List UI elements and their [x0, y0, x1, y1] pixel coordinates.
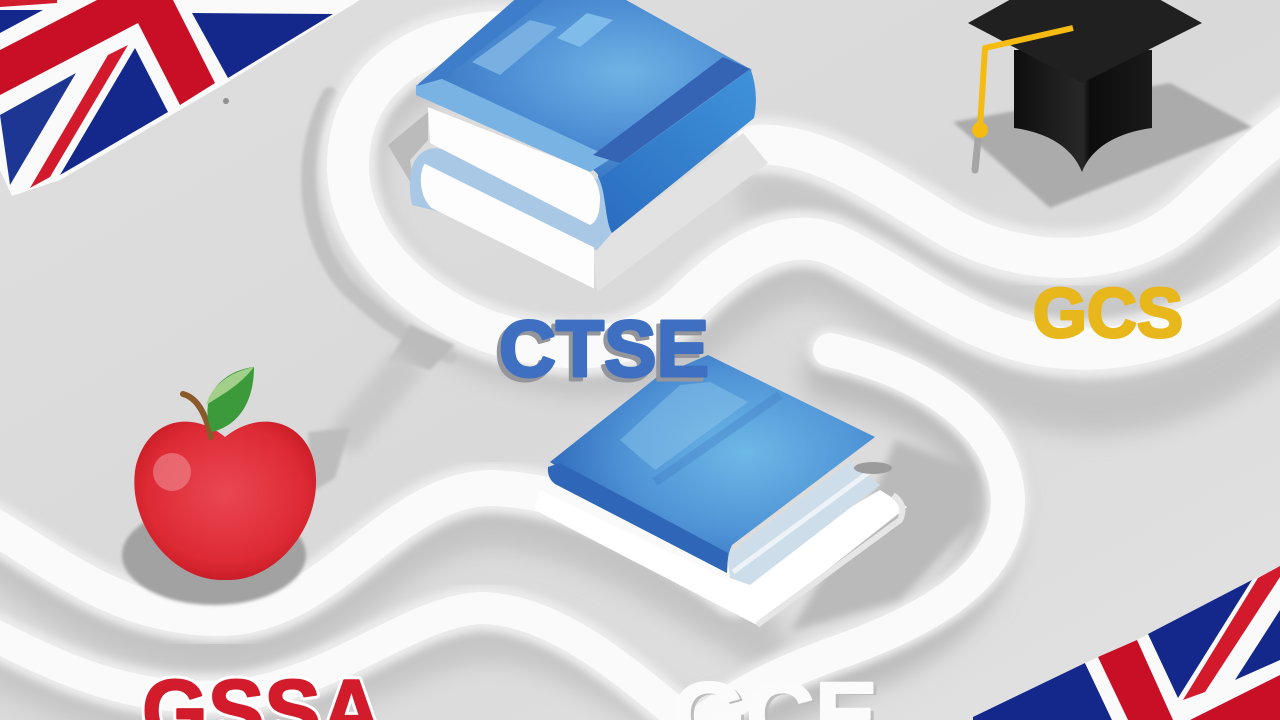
apple body — [134, 422, 316, 580]
winding road: upper route — [309, 32, 1280, 406]
cover highlight — [620, 382, 748, 470]
open blue book — [535, 355, 975, 632]
pages sheet — [535, 490, 907, 625]
small mark — [223, 98, 229, 104]
lower book side — [593, 133, 768, 292]
tassel shadow — [975, 140, 978, 170]
upper book pages — [428, 107, 600, 225]
pages edge — [727, 462, 880, 585]
cover — [550, 355, 875, 573]
cover crease — [655, 395, 780, 482]
cap board — [968, 0, 1202, 83]
book shadow — [388, 112, 428, 190]
flag: top left — [0, 0, 360, 196]
stem — [183, 394, 211, 437]
leaf — [207, 367, 254, 432]
label: CTSE: CTSE — [495, 308, 705, 397]
lower book pages — [422, 165, 593, 287]
graduation cap — [953, 0, 1252, 208]
winding road: lower route — [0, 350, 1008, 720]
tassel — [980, 28, 1073, 128]
cover front edge — [416, 78, 612, 172]
flag: bottom right — [973, 566, 1280, 720]
book shadow — [790, 440, 975, 632]
spine — [548, 463, 728, 573]
cap body — [1014, 50, 1152, 172]
cover bands — [593, 57, 750, 163]
faint side road — [340, 325, 455, 445]
apple — [122, 367, 350, 605]
label: GCS: GCS — [1033, 274, 1183, 352]
label: CTSE: CTSE — [499, 304, 709, 393]
cap shadow — [953, 83, 1252, 208]
apple shadow — [122, 505, 306, 605]
upper book spine — [598, 68, 756, 233]
book stack: CTSE — [388, 0, 768, 292]
lower book cover — [410, 148, 612, 250]
upper book cover — [416, 0, 752, 178]
